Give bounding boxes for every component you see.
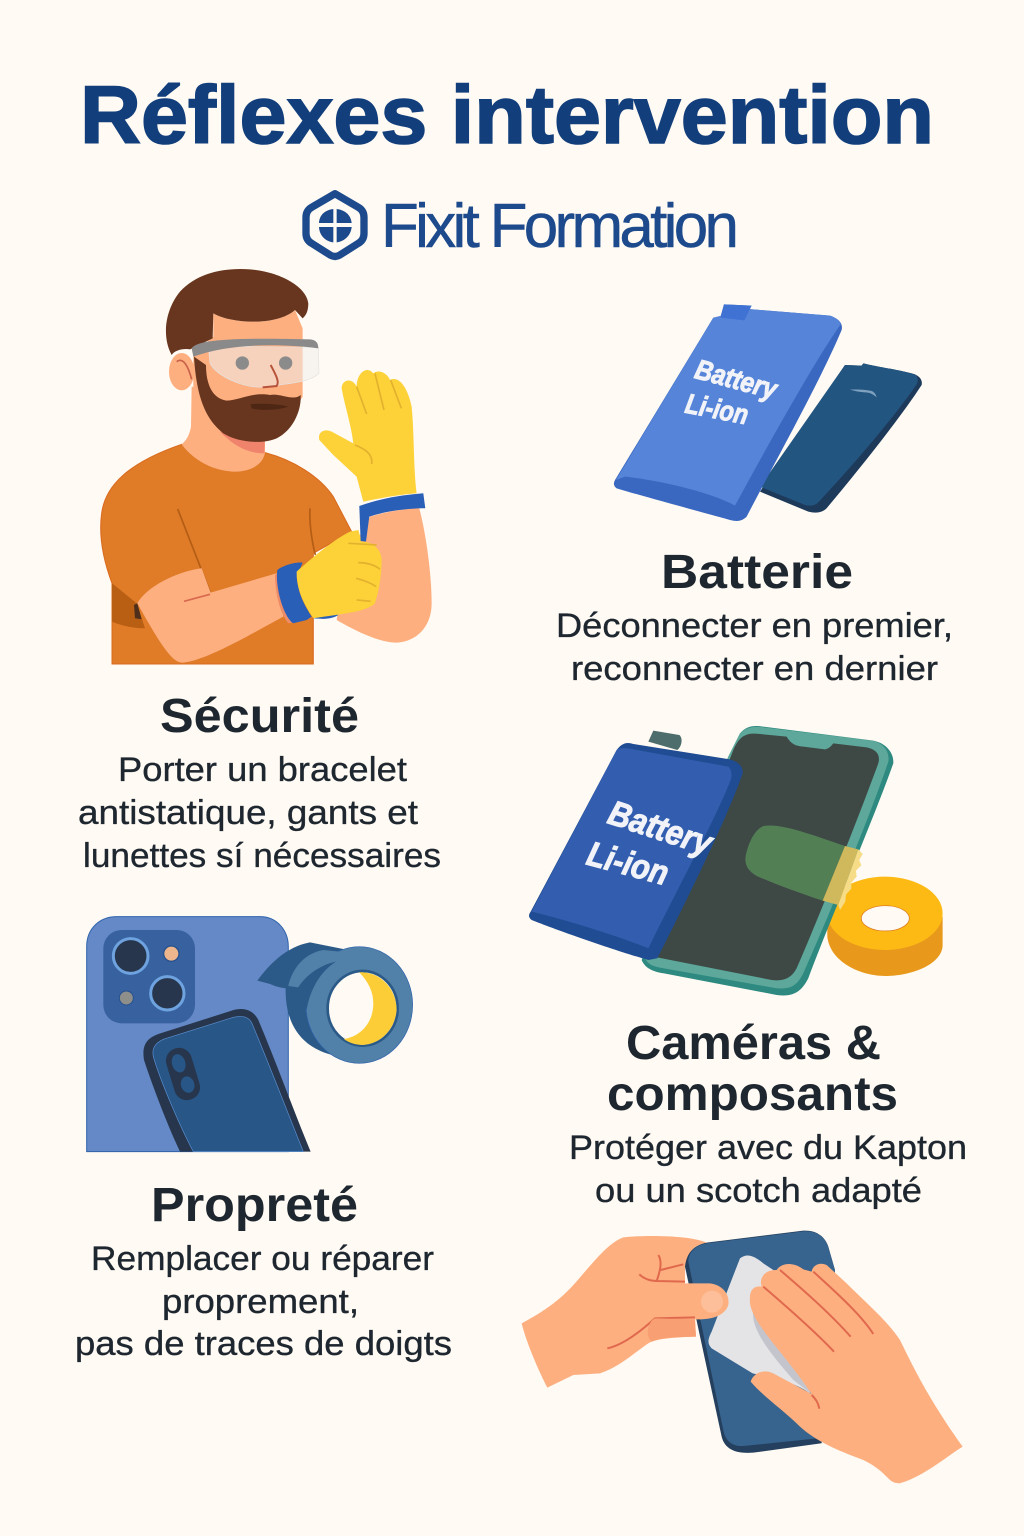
illustration: battery beside phone with kapton tape	[529, 726, 943, 995]
heading: Caméras & composants: composants	[607, 1068, 898, 1121]
text block: batterie	[556, 607, 953, 688]
text block: propreté: proprement,	[162, 1283, 359, 1321]
illustration: battery and phone back	[614, 304, 922, 521]
text block: propreté: Remplacer ou réparer	[91, 1240, 434, 1278]
text block: batterie: reconnecter en dernier	[571, 650, 938, 688]
text block: sécurité	[78, 751, 441, 875]
icon: logo hexagon	[306, 194, 364, 256]
text block: batterie: Déconnecter en premier,	[556, 607, 953, 645]
panel: sécurité text	[78, 690, 441, 875]
panel: batterie text	[556, 546, 953, 688]
illustration: hands cleaning phone with cloth	[522, 1231, 963, 1483]
illustration: technician with goggles and gloves	[101, 269, 432, 664]
text block: sécurité: antistatique, gants et	[78, 794, 419, 832]
heading: Caméras & composants: Caméras &	[626, 1017, 881, 1070]
logo wordmark: Fixit Formation	[381, 192, 739, 261]
text block: caméras: Protéger avec du Kapton	[569, 1129, 967, 1167]
panel: propreté text	[75, 1179, 452, 1363]
text block: sécurité: Porter un bracelet	[118, 751, 408, 789]
battery label	[683, 354, 781, 430]
battery label: Battery	[604, 794, 718, 864]
panel: caméras et composants text	[569, 1017, 967, 1210]
text block: sécurité: lunettes sí nécessaires	[83, 837, 441, 875]
text block: caméras	[569, 1129, 967, 1210]
battery label: Battery	[692, 354, 781, 405]
heading: Sécurité: Sécurité	[160, 690, 359, 743]
text block: caméras: ou un scotch adapté	[595, 1172, 922, 1210]
heading: Propreté: Propreté	[151, 1179, 358, 1232]
heading: Batterie: Batterie	[661, 546, 853, 599]
text block: propreté	[75, 1240, 452, 1363]
battery label	[583, 794, 718, 893]
title: Réflexes intervention	[80, 70, 934, 161]
battery label: Li-ion	[683, 388, 751, 430]
illustration: phones and masking tape	[87, 917, 413, 1152]
logo: Fixit Formation	[306, 192, 739, 261]
text block: propreté: pas de traces de doigts	[75, 1325, 452, 1363]
heading: Caméras & composants	[607, 1017, 898, 1121]
battery label: Li-ion	[583, 835, 673, 893]
